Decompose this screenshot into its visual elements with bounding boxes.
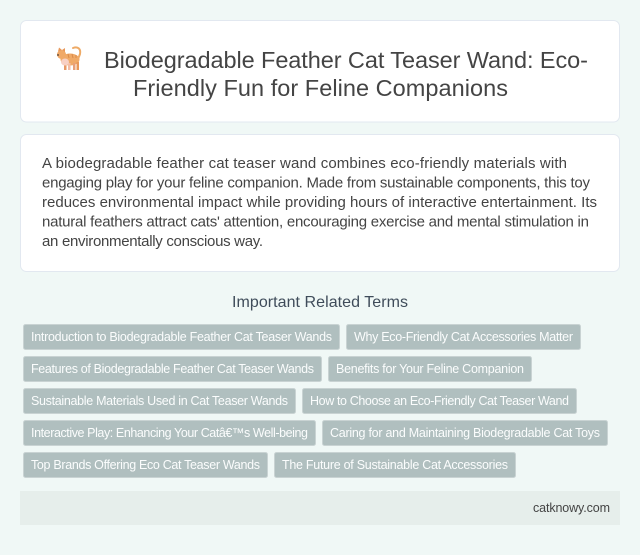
- title: [104, 47, 588, 101]
- tag: [24, 324, 340, 350]
- tag: How to Choose an Eco-Friendly Cat Teaser Wand: [310, 394, 569, 408]
- heading: related terms: Important Related Terms: [232, 294, 408, 311]
- description panel: [20, 134, 620, 272]
- tag: [24, 452, 268, 478]
- tag: Features of Biodegradable Feather Cat Teaser Wands: [31, 362, 314, 376]
- tag: Benefits for Your Feline Companion: [336, 362, 524, 376]
- description text: natural feathers attract cats' attention, encouraging exercise and mental stimulation in: [42, 214, 589, 230]
- description text: reduces environmental impact while providing hours of interactive entertainment. Its: [42, 194, 597, 211]
- description text: an environmentally conscious way.: [42, 233, 263, 250]
- header panel: [20, 20, 620, 122]
- title: Biodegradable Feather Cat Teaser Wand: Eco-: [104, 47, 588, 73]
- footer: [20, 491, 620, 525]
- tag: [24, 420, 316, 446]
- tag: [328, 356, 532, 382]
- tag: [302, 388, 576, 414]
- tag: [346, 324, 580, 350]
- icon: cat: [57, 47, 80, 70]
- related terms tags: [24, 324, 608, 478]
- tag: Interactive Play: Enhancing Your Catâ€™s Well-being: [31, 426, 308, 440]
- tag: Why Eco-Friendly Cat Accessories Matter: [354, 330, 573, 344]
- description text: engaging play for your feline companion. Made from sustainable components, this toy: [42, 174, 590, 192]
- tag: Caring for and Maintaining Biodegradable Cat Toys: [330, 426, 600, 440]
- tag: Sustainable Materials Used in Cat Teaser Wands: [31, 394, 288, 408]
- tag: [274, 452, 516, 478]
- description text: A biodegradable feather cat teaser wand combines eco-friendly materials with: [42, 155, 567, 172]
- description text: [42, 155, 597, 250]
- title: Friendly Fun for Feline Companions: [133, 75, 508, 101]
- tag: [322, 420, 608, 446]
- tag: Top Brands Offering Eco Cat Teaser Wands: [31, 458, 260, 472]
- tag: Introduction to Biodegradable Feather Cat Teaser Wands: [31, 330, 332, 344]
- tag: [24, 388, 296, 414]
- tag: [24, 356, 322, 382]
- tag: The Future of Sustainable Cat Accessories: [282, 458, 508, 472]
- footer: catknowy.com: [533, 501, 610, 515]
